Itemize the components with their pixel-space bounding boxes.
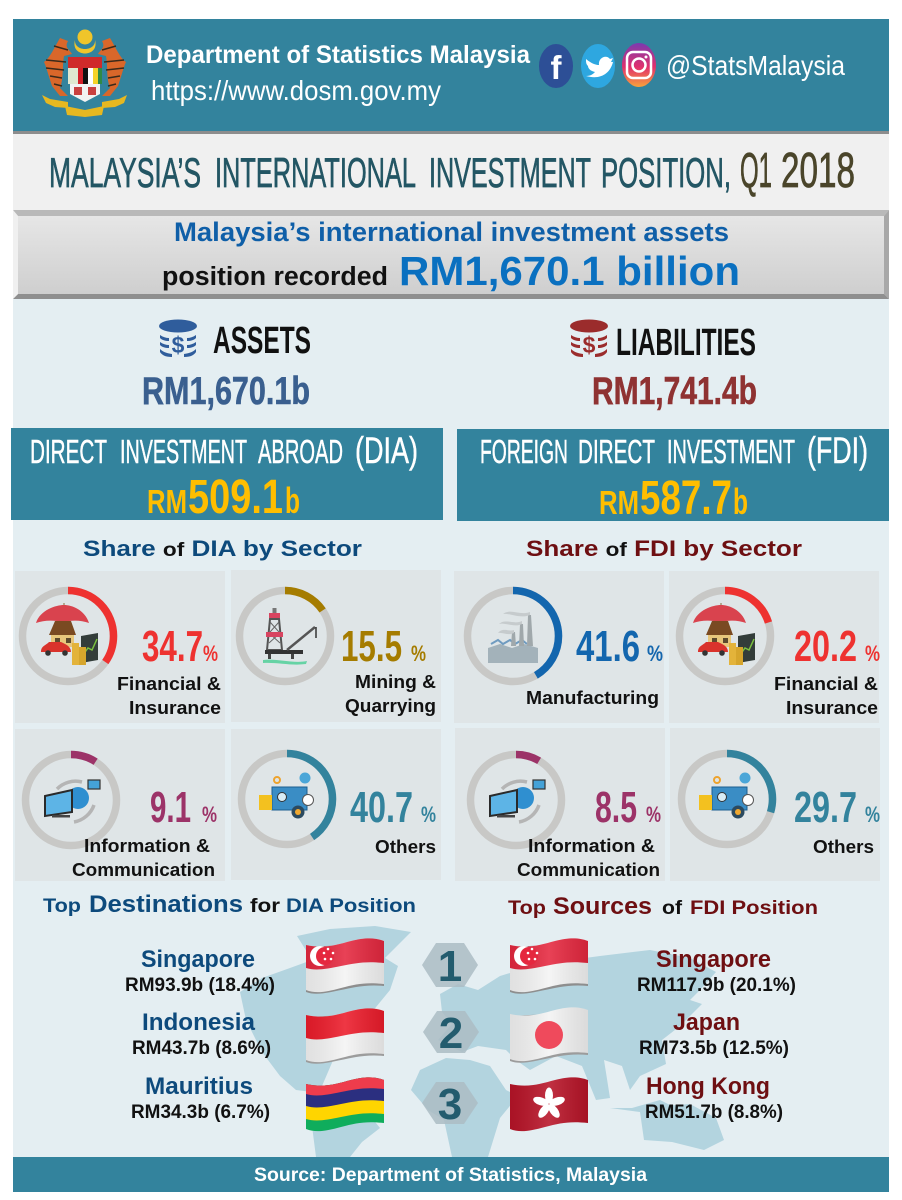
icon: liabilities coins	[570, 320, 608, 358]
flag: Japan	[510, 1007, 588, 1063]
donut	[22, 590, 114, 682]
icon: coat of arms	[42, 30, 127, 117]
label: Quarrying	[345, 695, 436, 716]
icon: instagram	[622, 43, 656, 87]
DIA value: RM	[147, 483, 187, 520]
panel: DIA banner	[11, 428, 443, 524]
label: Financial &	[117, 673, 221, 694]
heading: top sources: FDI Position	[690, 897, 818, 919]
social handle: @StatsMalaysia	[666, 50, 845, 81]
headline box	[13, 210, 889, 299]
heading: top destinations: Top	[43, 896, 81, 917]
value: 41.6	[576, 622, 640, 671]
card: DIA others	[231, 729, 441, 880]
source 3: Hong Kong: Hong Kong	[646, 1073, 770, 1100]
label: Communication	[517, 859, 660, 880]
percent: %	[421, 802, 436, 827]
card: FDI financial and insurance	[669, 571, 880, 723]
donut	[680, 590, 770, 682]
title: INTERNATIONAL	[215, 149, 416, 196]
rank 1: 1	[438, 942, 462, 991]
rank 3	[422, 1080, 478, 1129]
label: Financial &	[774, 673, 878, 694]
card: FDI others	[670, 728, 880, 881]
value: 15.5	[341, 622, 402, 671]
heading: top sources: Top	[508, 898, 546, 919]
label: Mining &	[355, 671, 436, 692]
source 3: Hong Kong: RM51.7b (8.8%)	[645, 1102, 783, 1123]
card: DIA information and communication	[15, 729, 225, 881]
card: DIA financial and insurance	[15, 571, 225, 723]
label: Manufacturing	[526, 687, 659, 708]
destination 1: Singapore: RM93.9b (18.4%)	[125, 975, 275, 996]
title period: Q1	[740, 144, 772, 198]
FDI heading: (FDI)	[807, 430, 868, 471]
page background panel	[13, 299, 889, 1159]
icon: information	[45, 780, 100, 822]
liabilities value: RM1,741.4b	[592, 370, 757, 413]
world map	[240, 926, 724, 1157]
icon: twitter	[581, 44, 615, 88]
headline line one: Malaysia’s international investment assets	[174, 217, 729, 247]
icon: financial	[36, 603, 98, 665]
heading: top destinations: for	[250, 896, 281, 917]
destination 1: Singapore: Singapore	[141, 946, 255, 973]
destination 2: Indonesia: Indonesia	[142, 1009, 256, 1036]
icon: factory	[488, 612, 538, 663]
heading: top sources: of	[662, 898, 683, 919]
title band	[13, 134, 889, 210]
flag: Singapore left	[306, 938, 384, 994]
icon: assets coins: $	[172, 332, 185, 358]
icon: information	[490, 780, 545, 822]
destination 3: Mauritius: Mauritius	[145, 1073, 253, 1100]
heading: share of FDI by sector: Share of FDI by Sector	[526, 536, 803, 561]
FDI heading: FOREIGN	[480, 433, 568, 470]
rank 2: 2	[439, 1009, 463, 1058]
value: 20.2	[794, 622, 857, 671]
donut	[26, 754, 116, 846]
percent: %	[203, 641, 218, 666]
title: POSITION,	[601, 149, 731, 196]
label: Insurance	[129, 697, 221, 718]
icon: others	[699, 772, 754, 818]
heading: top sources: Sources	[553, 893, 652, 920]
value: 8.5	[595, 783, 637, 832]
value: 29.7	[794, 783, 857, 832]
source 2: Japan: RM73.5b (12.5%)	[639, 1038, 789, 1059]
percent: %	[646, 802, 661, 827]
destination 2: Indonesia: RM43.7b (8.6%)	[132, 1038, 271, 1059]
assets summary	[142, 320, 311, 413]
percent: %	[865, 802, 880, 827]
source 1: Singapore: Singapore	[656, 946, 771, 973]
value: 34.7	[142, 622, 203, 671]
rank 3: 3	[438, 1080, 462, 1129]
rank 2	[423, 1009, 479, 1058]
rank 1	[422, 942, 478, 991]
liabilities label: LIABILITIES	[616, 322, 756, 364]
DIA heading: INVESTMENT	[120, 433, 247, 470]
percent: %	[411, 641, 426, 666]
assets value: RM1,670.1b	[142, 370, 310, 413]
source 2: Japan	[639, 1009, 789, 1059]
flag: Hong Kong	[510, 1077, 588, 1133]
source 2: Japan: Japan	[673, 1009, 740, 1036]
heading: top sources	[508, 893, 818, 920]
destination 3: Mauritius	[131, 1073, 270, 1123]
icon: facebook: f	[550, 49, 562, 86]
assets label: ASSETS	[213, 320, 311, 362]
donut	[682, 754, 772, 844]
label: Others	[813, 836, 874, 857]
website: https://www.dosm.gov.my	[151, 75, 441, 106]
label: Others	[375, 836, 436, 857]
percent: %	[202, 802, 217, 827]
FDI heading: DIRECT	[578, 433, 655, 470]
source 1: Singapore	[637, 946, 796, 996]
icon: financial	[693, 603, 755, 665]
icon: facebook	[539, 44, 573, 88]
headline figure: RM1,670.1 billion	[399, 248, 740, 294]
icon: oil rig	[263, 608, 316, 665]
FDI value: b	[733, 481, 748, 522]
DIA heading: ABROAD	[258, 433, 343, 470]
FDI value: RM	[599, 484, 639, 521]
donut	[240, 590, 330, 682]
percent: %	[865, 641, 880, 666]
flag: Indonesia	[306, 1008, 384, 1064]
title: MALAYSIA’S	[49, 149, 201, 196]
icon: liabilities coins: $	[583, 332, 596, 358]
label: Information &	[528, 835, 655, 856]
FDI value: 587.7	[640, 472, 732, 525]
destination 2: Indonesia	[132, 1009, 271, 1059]
source 1: Singapore: RM117.9b (20.1%)	[637, 975, 796, 996]
icon: assets coins	[159, 320, 197, 358]
label: Communication	[72, 859, 215, 880]
heading: top destinations	[43, 891, 416, 918]
DIA heading: DIRECT	[30, 433, 107, 470]
FDI heading: INVESTMENT	[667, 433, 795, 470]
destination 1: Singapore	[125, 946, 275, 996]
footer	[13, 1157, 889, 1192]
header banner	[13, 19, 889, 134]
donut	[242, 754, 332, 844]
card: FDI manufacturing	[454, 571, 664, 723]
panel: FDI banner	[457, 429, 889, 525]
liabilities summary	[570, 320, 757, 413]
value: 40.7	[350, 783, 413, 832]
heading: top destinations: Destinations	[89, 891, 243, 918]
flag: Mauritius	[306, 1077, 384, 1133]
icon: others	[259, 772, 314, 818]
donut	[468, 590, 558, 682]
organisation name: Department of Statistics Malaysia	[146, 41, 531, 69]
label: Insurance	[786, 697, 878, 718]
DIA value: b	[285, 480, 300, 521]
source text: Source: Department of Statistics, Malaysia	[254, 1165, 647, 1186]
percent: %	[647, 641, 663, 666]
headline line two: position recorded	[162, 263, 388, 291]
flag: Singapore right	[510, 938, 588, 994]
label: Information &	[84, 835, 210, 856]
heading: top destinations: DIA Position	[286, 895, 416, 917]
heading: share of DIA by sector: Share of DIA by Sector	[83, 536, 363, 561]
destination 3: Mauritius: RM34.3b (6.7%)	[131, 1102, 270, 1123]
DIA value: 509.1	[188, 471, 283, 524]
donut	[470, 754, 562, 846]
title: INVESTMENT	[429, 149, 591, 196]
card: DIA mining and quarrying	[231, 570, 441, 722]
value: 9.1	[150, 783, 191, 832]
source 3: Hong Kong	[645, 1073, 783, 1123]
card: FDI information and communication	[455, 728, 665, 881]
DIA heading: (DIA)	[355, 430, 418, 471]
title period: 2018	[781, 144, 855, 198]
